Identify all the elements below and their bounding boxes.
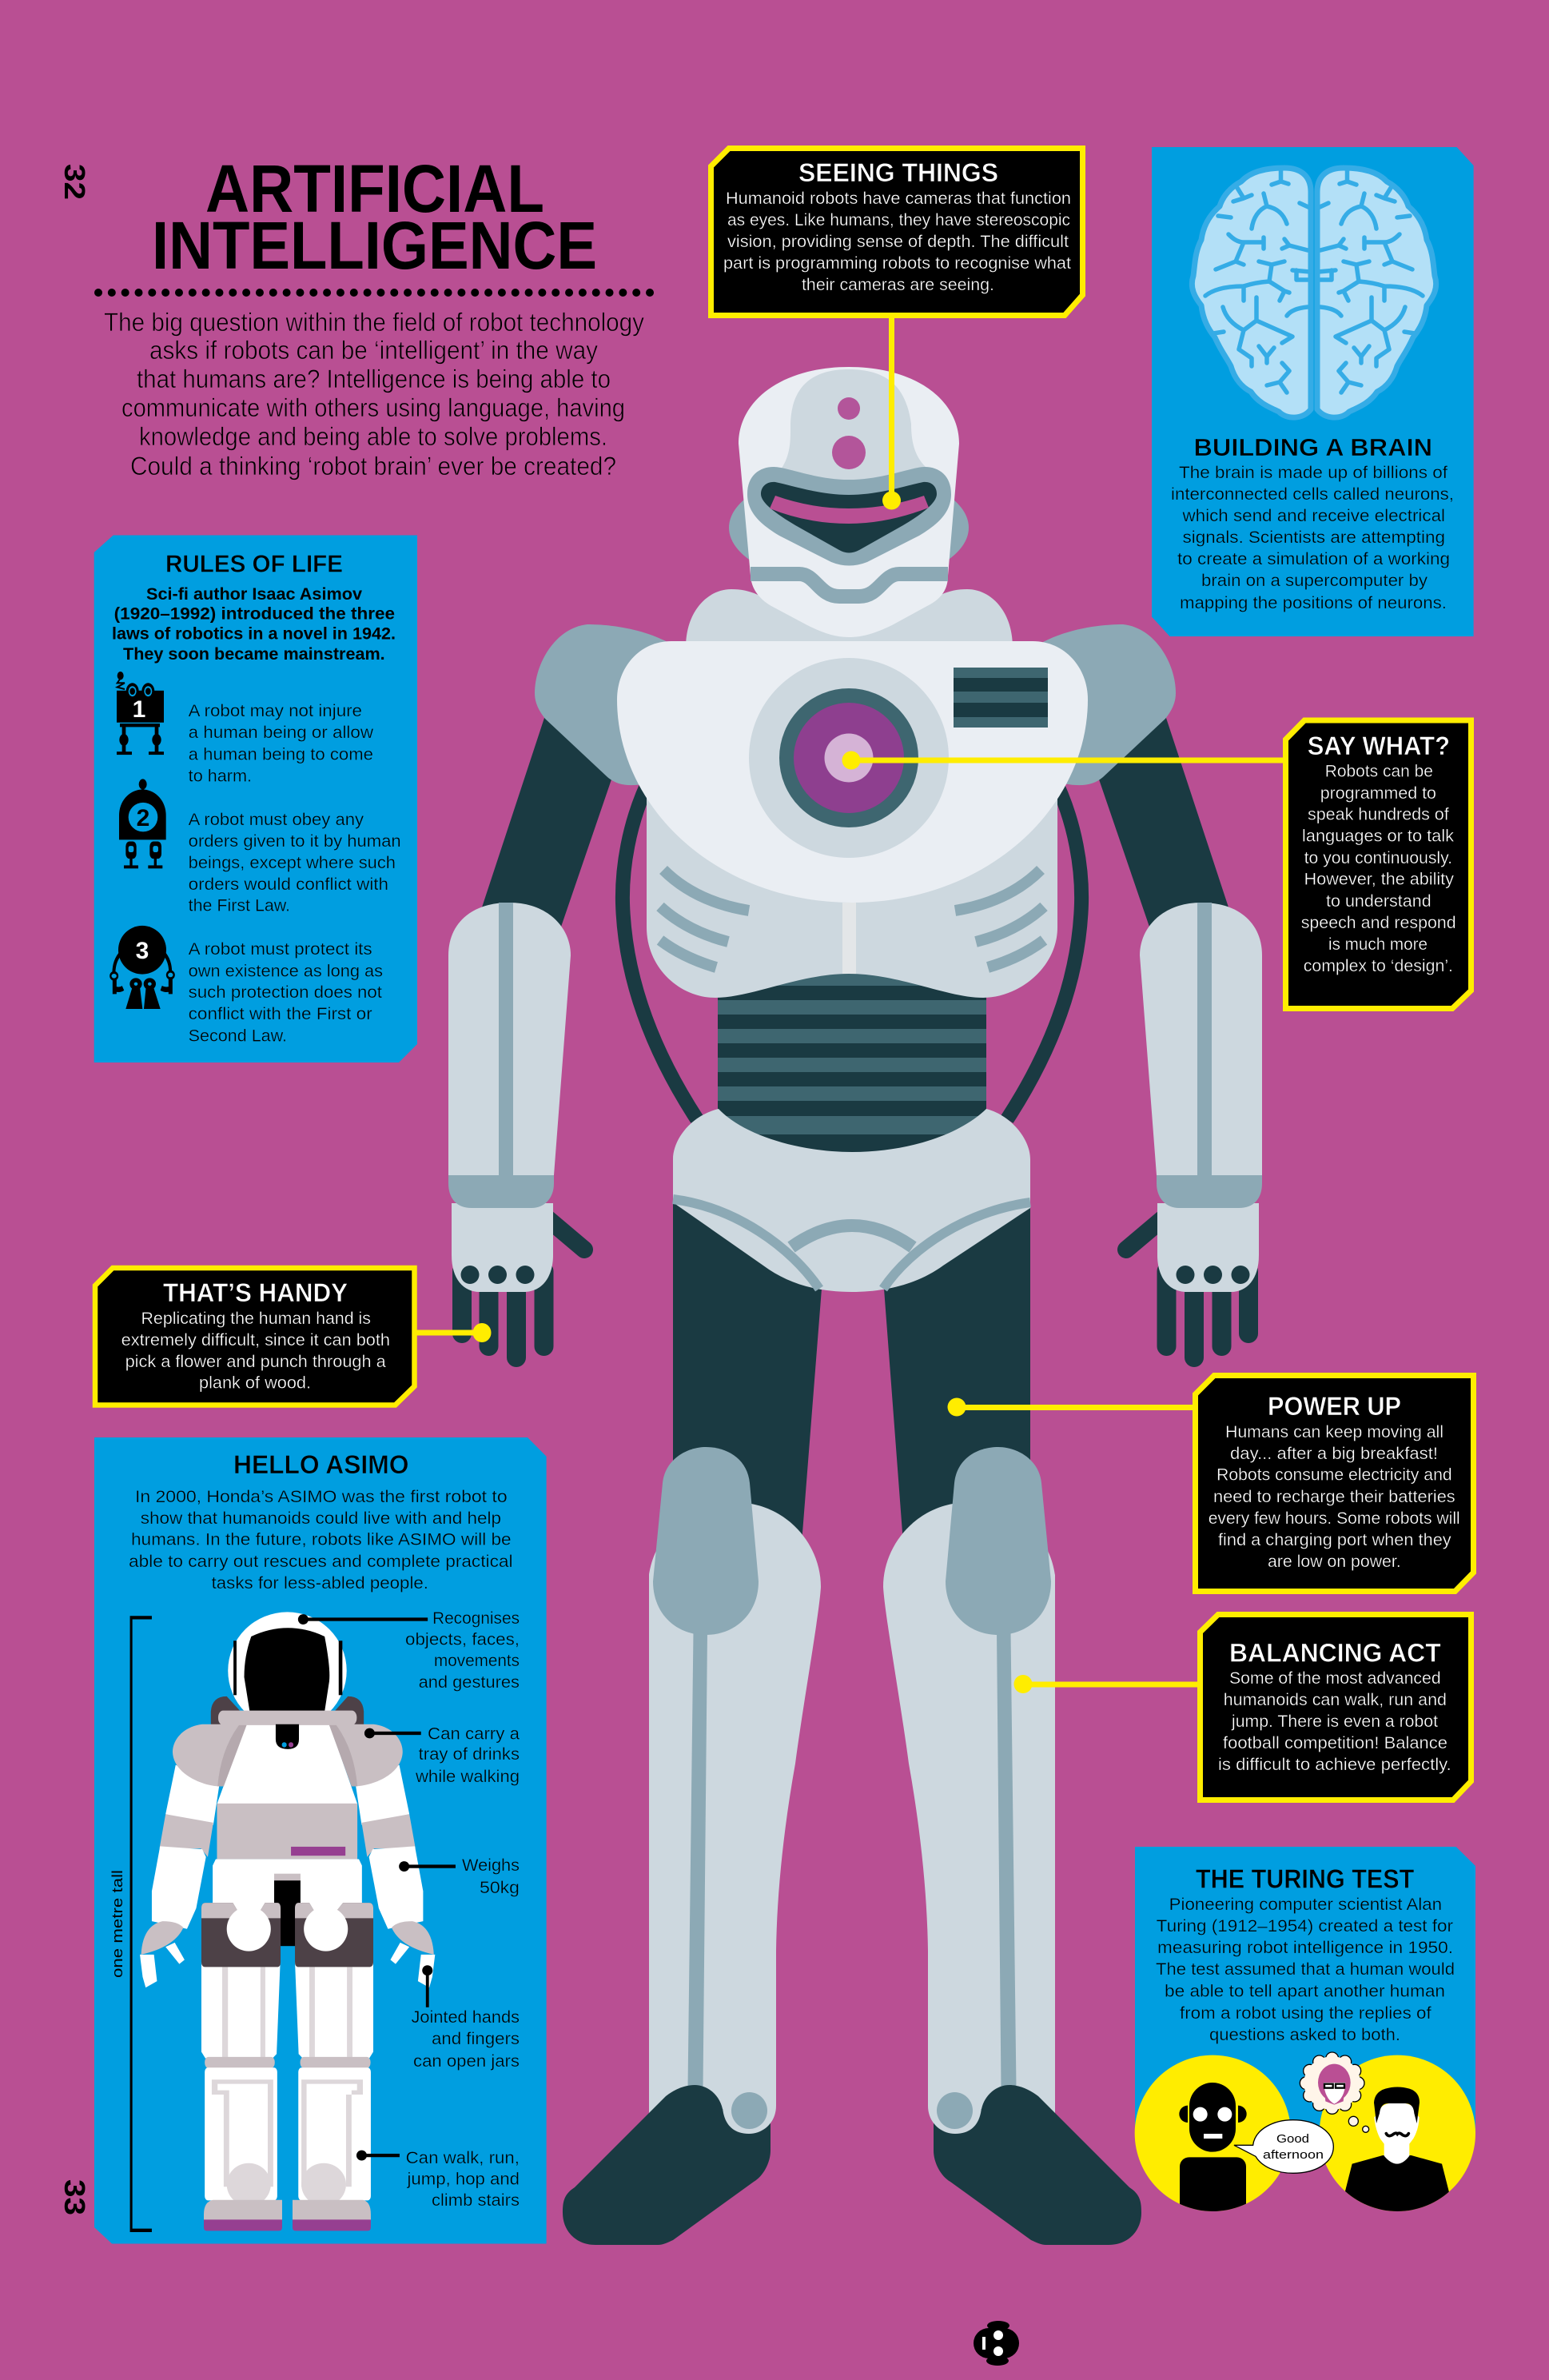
body: the turing test: Pioneering computer scientist Alan	[1169, 1895, 1442, 1914]
panel: rules of life	[94, 536, 417, 1062]
height bracket	[131, 1617, 152, 2231]
asimo shoulder caps	[211, 1696, 364, 1725]
body: power up: are low on power.	[1268, 1552, 1401, 1571]
icon: robot 1	[117, 672, 164, 755]
title: ARTIFICIAL	[205, 151, 544, 226]
icon: robot 2	[119, 779, 166, 868]
body: say what	[1301, 762, 1456, 975]
asimo shoulder pads	[173, 1724, 247, 1786]
callout: can walk: Can walk, run,	[406, 2149, 520, 2167]
upper arm left	[478, 716, 611, 931]
callout: recognises	[405, 1609, 520, 1692]
panel: building a brain	[1152, 147, 1474, 636]
intro text: Could a thinking ‘robot brain’ ever be created?	[130, 452, 616, 480]
forearm stripe	[499, 903, 513, 1178]
body: hello asimo: In 2000, Honda’s ASIMO was the first robot to	[135, 1487, 508, 1506]
panel: balancing act	[1201, 1615, 1471, 1800]
main robot	[448, 367, 1262, 2245]
body: building a brain: to create a simulation of a working	[1177, 549, 1450, 568]
intro: rules of life: (1920–1992) introduced the three	[114, 604, 395, 624]
heading: that's handy: THAT’S HANDY	[163, 1278, 348, 1307]
intro: rules of life: laws of robotics in a novel in 1942.	[112, 624, 396, 644]
asimo neck	[276, 1724, 299, 1749]
body: hello asimo	[129, 1487, 513, 1593]
connector: balancing act	[1013, 1675, 1199, 1693]
chest vent	[954, 668, 1048, 728]
callout: can walk: jump, hop and	[406, 2170, 520, 2189]
chest plate	[617, 641, 1088, 903]
panel: power up	[1196, 1375, 1474, 1591]
shin	[649, 1504, 821, 2115]
foot	[563, 2085, 771, 2245]
intro: rules of life: They soon became mainstream.	[123, 644, 385, 664]
body: building a brain: brain on a supercomputer by	[1201, 571, 1428, 590]
asimo torso	[217, 1724, 357, 1804]
knee	[653, 1447, 759, 1635]
ribs	[660, 870, 1044, 967]
body: power up: Humans can keep moving all	[1225, 1422, 1443, 1441]
rule 1: a human being to come	[189, 745, 373, 764]
bubble text: Good	[1276, 2132, 1309, 2146]
body: hello asimo: humans. In the future, robots like ASIMO will be	[131, 1530, 512, 1549]
body: power up: Robots consume electricity and	[1217, 1465, 1452, 1485]
asimo pelvis	[213, 1859, 362, 1912]
shoulder right	[1043, 624, 1176, 785]
intro text: knowledge and being able to solve problems.	[139, 422, 607, 451]
body: seeing things	[723, 189, 1071, 294]
rule 2: beings, except where such	[189, 854, 396, 872]
body: balancing act: football competition! Balance	[1223, 1733, 1447, 1752]
callout: can walk	[406, 2149, 520, 2210]
callout: can carry: tray of drinks	[419, 1745, 520, 1764]
intro: rules of life	[112, 584, 396, 664]
helmet dome	[779, 369, 931, 496]
panel: the turing test	[1135, 1847, 1475, 2216]
body: power up: every few hours. Some robots will	[1209, 1509, 1460, 1528]
panel: seeing things	[711, 149, 1082, 315]
page number 33: 33	[58, 2179, 91, 2215]
rule 3: Second Law.	[189, 1027, 287, 1046]
body: power up: find a charging port when they	[1218, 1530, 1451, 1549]
intro text: The big question within the field of robot technology	[104, 308, 644, 337]
panel: say what	[1285, 720, 1471, 1009]
left arm	[448, 903, 584, 1357]
ankle cup	[723, 2071, 776, 2134]
body: say what: programmed to	[1320, 783, 1436, 803]
asimo left arm	[140, 1765, 219, 1987]
panel: that's handy	[95, 1268, 414, 1405]
rule 3: conflict with the First or	[189, 1005, 372, 1023]
rule 3: A robot must protect its	[189, 940, 372, 959]
rule 3: such protection does not	[189, 983, 382, 1002]
body: seeing things: as eyes. Like humans, they have stereoscopic	[727, 210, 1070, 229]
body: that's handy: extremely difficult, since it can both	[121, 1330, 390, 1349]
heading: say what: SAY WHAT?	[1308, 732, 1450, 760]
rule 1: A robot may not injure	[189, 702, 362, 720]
asimo belly	[217, 1804, 357, 1859]
callout: jointed hands: Jointed hands	[411, 2008, 520, 2027]
callout: jointed hands: can open jars	[413, 2052, 520, 2071]
heading: the turing test: THE TURING TEST	[1196, 1864, 1414, 1894]
visor surround	[747, 467, 951, 566]
body: power up: need to recharge their batteries	[1213, 1487, 1455, 1506]
intro text: that humans are? Intelligence is being able to	[137, 365, 611, 393]
rule 2: orders would conflict with	[189, 875, 388, 894]
body: the turing test: Turing (1912–1954) created a test for	[1157, 1916, 1453, 1935]
rule 3: own existence as long as	[189, 963, 383, 981]
callout: weighs: 50kg	[480, 1879, 520, 1897]
rule 3	[189, 940, 383, 1046]
palm	[452, 1203, 553, 1292]
body: seeing things: their cameras are seeing.	[802, 275, 994, 294]
callout: jointed hands	[411, 2008, 520, 2071]
heading: seeing things: SEEING THINGS	[798, 158, 998, 187]
shoulder left	[535, 624, 667, 785]
brain left hemisphere	[1192, 168, 1311, 417]
heading: hello asimo: HELLO ASIMO	[233, 1450, 408, 1479]
fingers	[462, 1271, 544, 1357]
body: that's handy: Replicating the human hand is	[141, 1309, 371, 1328]
shin stripe	[687, 1632, 707, 2088]
centre stripe	[842, 903, 856, 974]
neck shoulders	[686, 589, 1013, 648]
icon: robot 2: 2	[137, 805, 149, 831]
body: the turing test: from a robot using the replies of	[1180, 2003, 1432, 2023]
heading: balancing act: BALANCING ACT	[1229, 1639, 1441, 1668]
callout: recognises: and gestures	[419, 1673, 520, 1692]
rule 1: to harm.	[189, 767, 252, 785]
cuff	[448, 1175, 554, 1208]
body: building a brain	[1171, 463, 1454, 612]
asimo visor	[245, 1628, 329, 1712]
heading: power up: POWER UP	[1268, 1392, 1401, 1421]
rule 1: a human being or allow	[189, 724, 374, 742]
right lower leg	[883, 1447, 1141, 2245]
dotted divider	[98, 289, 652, 297]
body: power up: day... after a big breakfast!	[1230, 1444, 1438, 1463]
body: say what: speak hundreds of	[1308, 805, 1449, 824]
bubble text	[1263, 2132, 1324, 2162]
body: balancing act: humanoids can walk, run and	[1224, 1690, 1447, 1709]
asimo thighs	[201, 1962, 281, 2059]
rule 2: orders given to it by human	[189, 832, 401, 851]
body: say what: languages or to talk	[1302, 827, 1454, 846]
icon: robot 3: 3	[136, 938, 149, 964]
callout: can walk: climb stairs	[432, 2191, 520, 2210]
callout: can carry: while walking	[415, 1768, 520, 1786]
asimo right arm	[356, 1765, 435, 1987]
torso	[647, 767, 1057, 998]
forehead lights	[832, 397, 866, 469]
forearm	[448, 903, 571, 1175]
upper legs	[673, 1191, 1030, 1543]
callout: can carry: Can carry a	[428, 1725, 520, 1743]
body: the turing test	[1156, 1895, 1455, 2044]
height label: one metre tall	[110, 1870, 125, 1978]
body: balancing act: jump. There is even a robot	[1231, 1712, 1438, 1731]
body: building a brain: The brain is made up of billions of	[1179, 463, 1447, 482]
body: balancing act	[1218, 1668, 1451, 1774]
right arm	[1126, 903, 1262, 1357]
heading: rules of life: RULES OF LIFE	[165, 550, 343, 577]
callout: can carry	[415, 1725, 520, 1786]
chest core	[749, 658, 949, 858]
knuckles	[460, 1266, 534, 1284]
callout: weighs: Weighs	[462, 1856, 520, 1875]
body: say what: Robots can be	[1325, 762, 1433, 781]
body: say what: to understand	[1326, 891, 1432, 911]
body: that's handy	[121, 1309, 390, 1393]
intro text	[104, 308, 644, 480]
visor eye band	[770, 496, 929, 524]
left lower leg	[563, 1447, 821, 2245]
asimo figure	[131, 1612, 456, 2231]
body: hello asimo: able to carry out rescues and complete practical	[129, 1552, 513, 1571]
connector: power up	[948, 1397, 1195, 1417]
ear discs	[729, 470, 969, 585]
body: say what: However, the ability	[1304, 870, 1454, 889]
panel: hello asimo	[94, 1437, 547, 2243]
helmet	[739, 367, 959, 637]
callout: recognises: movements	[434, 1652, 520, 1670]
callout: jointed hands: and fingers	[432, 2030, 520, 2048]
body: the turing test: be able to tell apart another human	[1165, 1982, 1445, 2001]
body: building a brain: signals. Scientists are attempting	[1183, 528, 1445, 547]
asimo helmet	[228, 1612, 347, 1729]
hip lines	[673, 1199, 1030, 1289]
asimo collar	[218, 1711, 356, 1725]
body: seeing things: part is programming robots to recognise what	[723, 253, 1071, 273]
body: say what: speech and respond	[1301, 913, 1456, 932]
icon: robot 1: 1	[133, 696, 145, 723]
connector: seeing things	[882, 318, 901, 510]
yellow circle left	[1135, 2055, 1291, 2211]
callout pointers	[298, 1614, 456, 2161]
turing robot	[1179, 2083, 1247, 2216]
body: the turing test: measuring robot intelligence in 1950.	[1157, 1938, 1453, 1957]
body: seeing things: vision, providing sense of depth. The difficult	[727, 232, 1069, 251]
asimo knee bands	[205, 2057, 275, 2068]
body: the turing test: The test assumed that a human would	[1156, 1959, 1455, 1979]
chin band	[751, 574, 948, 596]
thought cloud	[1300, 2052, 1369, 2132]
rule 2: the First Law.	[189, 897, 290, 915]
body: balancing act: Some of the most advanced	[1229, 1668, 1441, 1688]
ankle bolt	[731, 2092, 767, 2129]
turing human	[1344, 2087, 1449, 2215]
asimo shins	[205, 2067, 277, 2200]
body: hello asimo: tasks for less-abled people.	[212, 1573, 428, 1593]
asimo hip blocks	[201, 1903, 281, 1967]
body: building a brain: interconnected cells called neurons,	[1171, 484, 1454, 504]
heading: building a brain: BUILDING A BRAIN	[1194, 433, 1432, 461]
rule 2	[189, 811, 401, 915]
upper arm right	[1099, 716, 1232, 931]
visor	[761, 482, 937, 553]
intro text: communicate with others using language, having	[121, 393, 625, 422]
yellow circle right	[1320, 2055, 1475, 2211]
page number 32: 32	[58, 164, 91, 200]
icon: robot 3	[110, 926, 174, 1009]
body: building a brain: mapping the positions of neurons.	[1180, 593, 1447, 612]
rule 1	[189, 702, 374, 785]
title	[152, 151, 597, 283]
callout: weighs	[462, 1856, 520, 1897]
chest ring	[623, 775, 1081, 1119]
body: that's handy: plank of wood.	[199, 1373, 311, 1393]
asimo feet	[204, 2200, 282, 2221]
thumb	[544, 1215, 584, 1250]
body: power up	[1209, 1422, 1460, 1571]
callout: recognises: Recognises	[432, 1609, 520, 1628]
body: say what: complex to ‘design’.	[1304, 956, 1453, 975]
intro text: asks if robots can be ‘intelligent’ in the way	[149, 336, 598, 365]
intro: rules of life: Sci-fi author Isaac Asimov	[146, 584, 362, 604]
title: INTELLIGENCE	[152, 208, 597, 283]
body: that's handy: pick a flower and punch through a	[125, 1352, 386, 1371]
hips	[673, 1109, 1030, 1292]
body: say what: to you continuously.	[1304, 848, 1452, 867]
brain right hemisphere	[1317, 168, 1436, 417]
connector: that's handy	[416, 1323, 491, 1342]
body: balancing act: is difficult to achieve perfectly.	[1218, 1755, 1451, 1774]
bubble text: afternoon	[1263, 2148, 1324, 2162]
icon: brain	[1192, 168, 1436, 417]
icon: footer robot	[974, 2321, 1019, 2366]
body: the turing test: questions asked to both.	[1209, 2025, 1400, 2044]
body: seeing things: Humanoid robots have cameras that function	[726, 189, 1071, 208]
body: building a brain: which send and receive electrical	[1181, 506, 1445, 525]
rule 2: A robot must obey any	[189, 811, 364, 829]
waist	[718, 974, 986, 1152]
body: say what: is much more	[1328, 935, 1428, 954]
illustration: robot and human	[1135, 2052, 1475, 2216]
body: hello asimo: show that humanoids could live with and help	[141, 1509, 501, 1528]
connector: say what	[842, 751, 1284, 769]
callout: recognises: objects, faces,	[405, 1631, 520, 1649]
speech bubble	[1234, 2120, 1333, 2173]
